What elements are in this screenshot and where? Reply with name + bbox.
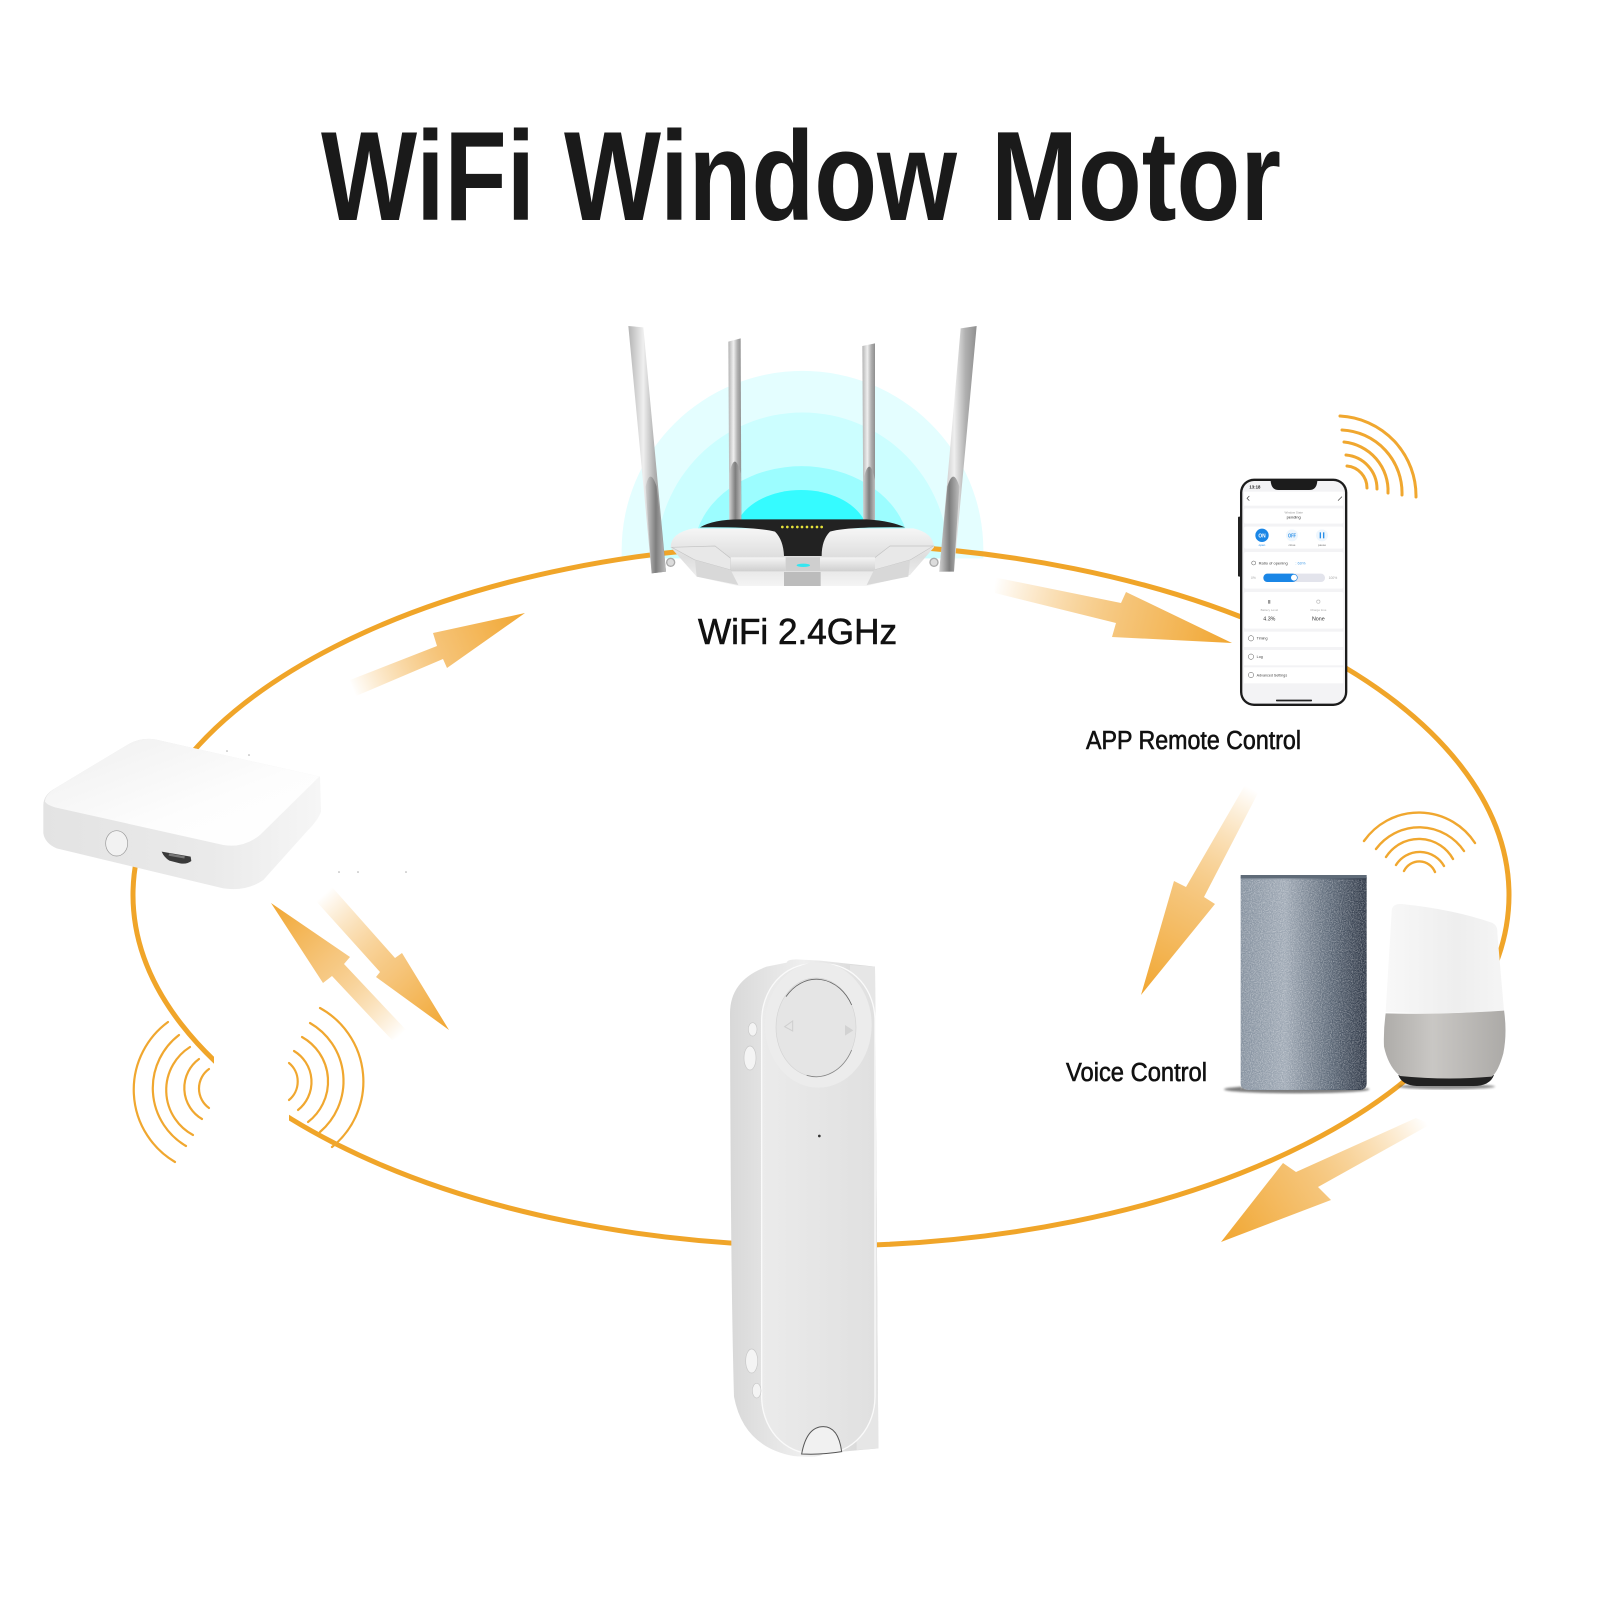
app battery and charge card — [1244, 592, 1343, 629]
arrow: motor to hub — [271, 903, 408, 1040]
cyan signal dome — [622, 371, 983, 558]
motor rear flange — [850, 965, 878, 1450]
round smart speaker — [1384, 904, 1506, 1089]
app on off pause buttons: OFF — [1288, 533, 1296, 539]
app on off pause buttons: pause — [1318, 543, 1326, 547]
wireless waves: speaker signal — [1364, 813, 1475, 872]
app on off pause buttons: close — [1289, 543, 1296, 547]
motor bottom clip — [802, 1427, 842, 1454]
app window state card — [1244, 508, 1343, 524]
app on off pause buttons — [1244, 527, 1343, 549]
arrow: hub to router — [350, 613, 525, 696]
phone frame — [1238, 479, 1347, 706]
window motor device — [730, 959, 878, 1457]
arrow: router to phone — [993, 577, 1232, 643]
motor body side — [730, 959, 878, 1457]
title — [321, 105, 1281, 247]
wireless waves: motor signal left — [134, 1022, 209, 1162]
wireless waves: phone signal — [1340, 416, 1416, 497]
router — [628, 326, 977, 586]
arrow: speakers to motor — [1221, 1118, 1431, 1242]
wireless waves: motor signal right — [289, 1008, 363, 1147]
app on off pause buttons: open — [1259, 543, 1266, 547]
app window state card: pending — [1287, 515, 1301, 520]
app window state card: Window State — [1284, 510, 1303, 514]
smart speakers — [1224, 875, 1506, 1093]
arrow: phone to speakers — [1141, 785, 1258, 995]
app battery and charge card: None — [1312, 617, 1325, 623]
hub button — [106, 831, 128, 856]
white gap over ring at lower left — [214, 1000, 289, 1170]
label: APP Remote Control: APP Remote Control — [1086, 727, 1301, 755]
app ratio of opening slider: : 60% — [1295, 560, 1306, 565]
motor side buttons — [744, 1023, 761, 1398]
orange connection ring — [133, 544, 1509, 1246]
app battery and charge card: 4.3% — [1263, 617, 1276, 623]
label: Voice Control: Voice Control — [1066, 1059, 1207, 1087]
app settings rows: Log — [1257, 655, 1263, 659]
app status bar: 13:18 — [1249, 484, 1261, 489]
antennas — [628, 326, 977, 573]
motor dial button — [776, 978, 856, 1077]
arrow: hub to motor — [316, 887, 449, 1030]
app header — [1244, 492, 1343, 506]
hub top face — [45, 739, 319, 846]
app ratio of opening slider: 0% — [1251, 576, 1256, 580]
stray specks near hub — [226, 750, 407, 873]
app battery and charge card: Charge time — [1310, 608, 1327, 612]
gateway hub device — [43, 739, 321, 889]
app settings rows: Timing — [1257, 637, 1268, 641]
app battery and charge card: Battery Level — [1261, 608, 1278, 612]
title: WiFi — [321, 105, 535, 247]
app ratio of opening slider: Ratio of opening — [1259, 560, 1288, 565]
fabric smart speaker — [1224, 875, 1369, 1093]
app settings rows — [1244, 632, 1343, 683]
motor dial ring — [765, 962, 872, 1088]
hub usb port — [162, 852, 191, 864]
app ratio of opening slider: 100% — [1329, 576, 1337, 580]
phone with app screen — [1238, 479, 1347, 706]
app ratio of opening slider — [1244, 552, 1343, 589]
hub side walls — [43, 739, 321, 889]
title: Motor — [991, 105, 1281, 247]
label: WiFi 2.4GHz: WiFi 2.4GHz — [698, 611, 897, 652]
motor front plate — [762, 964, 875, 1453]
router body — [667, 519, 938, 586]
app on off pause buttons: ON — [1258, 533, 1266, 539]
motor indicator dot — [818, 1135, 821, 1137]
title: Window — [564, 105, 958, 247]
app settings rows: Advanced Settings — [1257, 673, 1287, 677]
